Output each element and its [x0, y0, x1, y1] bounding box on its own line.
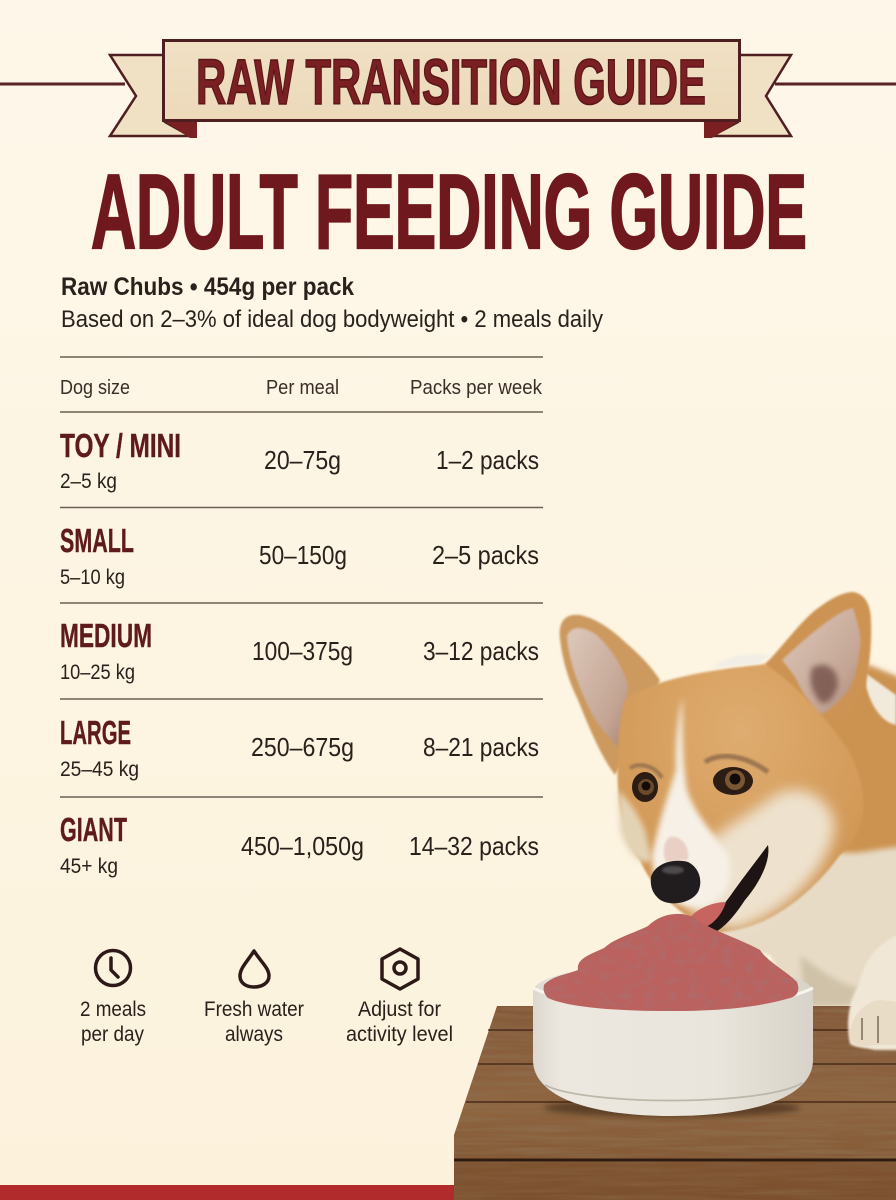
row: large: 8–21 packs	[423, 732, 539, 762]
row: medium	[60, 617, 539, 684]
tip: 2 meals per day: 2 meals	[80, 998, 146, 1021]
mouth	[690, 845, 768, 936]
tip: adjust for activity: Adjust for	[358, 998, 441, 1021]
row: toy / mini: TOY / MINI	[60, 427, 181, 464]
wooden table	[454, 1006, 896, 1200]
row: large: 250–675g	[251, 732, 354, 762]
row: giant: 14–32 packs	[409, 831, 539, 861]
blaze	[652, 697, 730, 908]
tip: fresh water: always	[225, 1023, 283, 1046]
row: giant	[60, 811, 539, 878]
table header: Packs per week	[410, 377, 543, 399]
product info	[61, 273, 604, 333]
row: toy / mini: 20–75g	[264, 445, 341, 475]
tip: 2 meals per day: per day	[81, 1023, 144, 1046]
row: toy / mini	[60, 427, 539, 493]
tip: adjust for activity	[346, 949, 453, 1046]
row: large	[60, 714, 539, 781]
row: large: LARGE	[60, 714, 131, 751]
row: giant: 450–1,050g	[241, 831, 364, 861]
row: small: 50–150g	[259, 540, 347, 570]
ribbon main panel	[164, 40, 740, 120]
row: small: 2–5 packs	[432, 540, 539, 570]
row: giant: GIANT	[60, 811, 127, 848]
feeding table	[60, 357, 543, 878]
row: large: 25–45 kg	[60, 758, 139, 781]
front leg and paw	[848, 925, 896, 1050]
bowl	[533, 914, 813, 1117]
ribbon right tail	[712, 55, 791, 136]
title ribbon banner	[0, 40, 896, 138]
footer red strip	[0, 1185, 454, 1200]
table header	[60, 377, 543, 399]
right ear	[765, 592, 871, 728]
ribbon left tail	[110, 55, 190, 136]
icon: clock	[96, 950, 130, 986]
row: giant: 45+ kg	[60, 855, 118, 878]
left ear	[560, 615, 660, 775]
row: medium: 100–375g	[252, 636, 353, 666]
illustration: corgi eating from bowl	[454, 592, 896, 1200]
right eye	[713, 767, 753, 795]
row: medium: 10–25 kg	[60, 661, 135, 684]
product info: Raw Chubs • 454g per pack	[61, 273, 354, 301]
left eye	[632, 772, 658, 802]
left jowl fur	[618, 790, 652, 862]
row: medium: MEDIUM	[60, 617, 152, 654]
row: small: SMALL	[60, 522, 134, 559]
dog body	[700, 665, 896, 1006]
product info: Based on 2–3% of ideal dog bodyweight • 2 meals daily	[61, 306, 604, 333]
cheek white fur	[687, 790, 835, 930]
dog head	[617, 654, 864, 936]
tip: fresh water	[204, 951, 304, 1046]
table header: Dog size	[60, 377, 130, 399]
tip: adjust for activity: activity level	[346, 1023, 453, 1046]
row: toy / mini: 1–2 packs	[436, 445, 539, 475]
table header: Per meal	[266, 377, 339, 399]
row: small	[60, 522, 539, 589]
row: toy / mini: 2–5 kg	[60, 470, 117, 493]
tip: fresh water: Fresh water	[204, 998, 304, 1021]
tip: 2 meals per day	[80, 950, 146, 1046]
brow shading	[705, 756, 768, 772]
icon: hexagon nut	[382, 949, 418, 989]
row: small: 5–10 kg	[60, 566, 125, 589]
head-top white patch	[712, 654, 770, 668]
raw meat	[544, 914, 798, 1011]
nose	[651, 837, 700, 903]
icon: water drop	[240, 951, 269, 987]
row: medium: 3–12 packs	[423, 636, 539, 666]
